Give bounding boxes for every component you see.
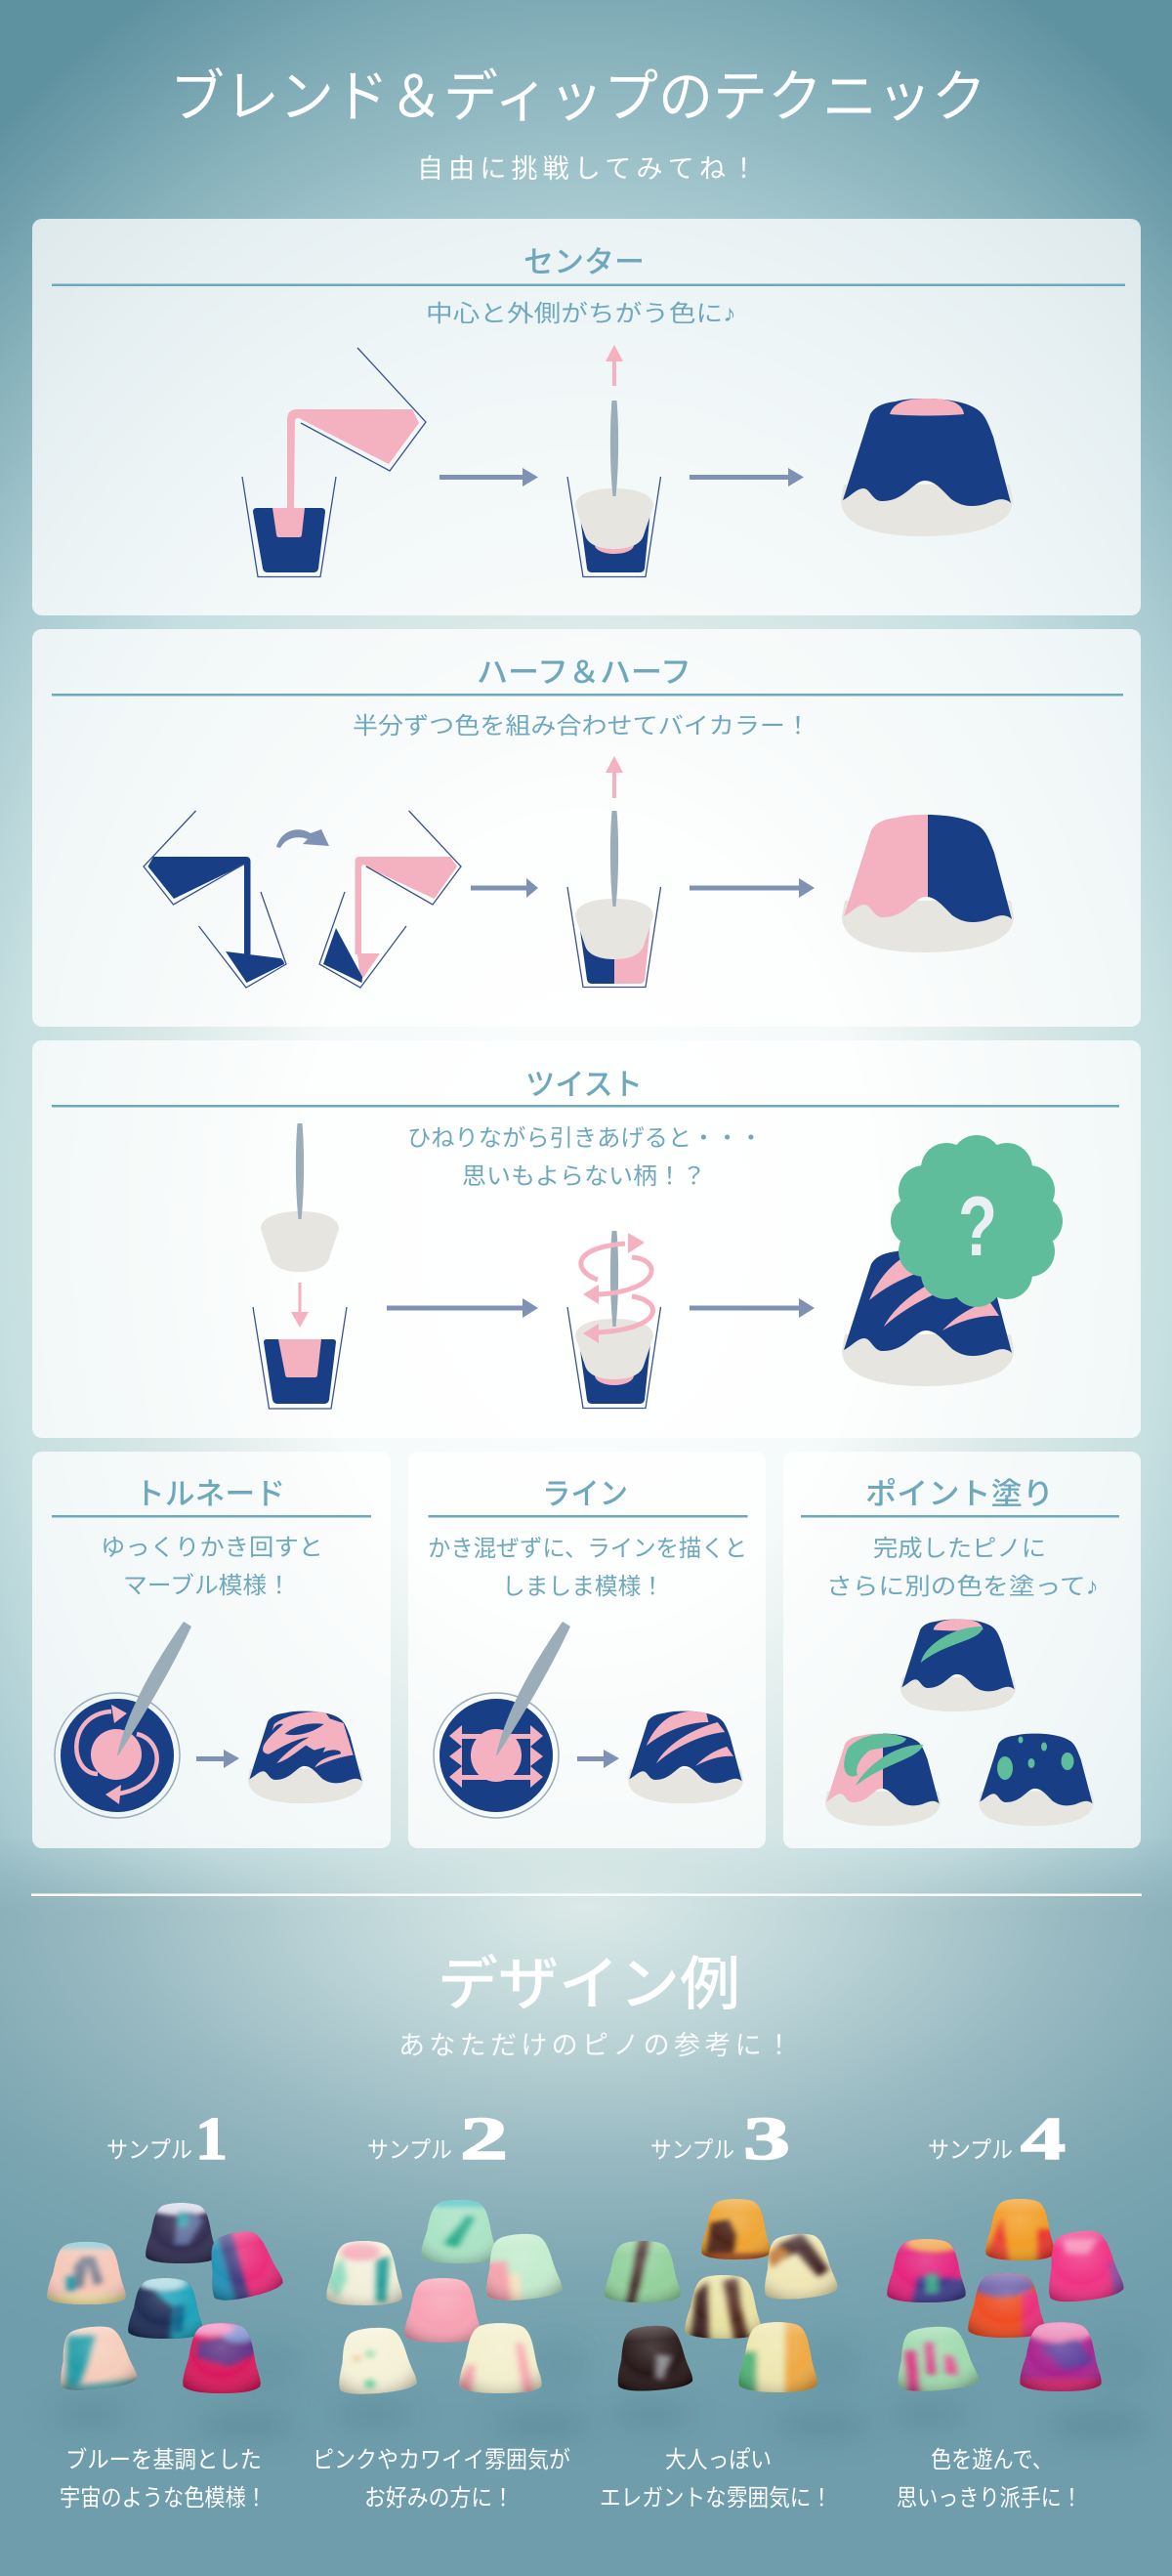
half pino with green swirl	[825, 1734, 941, 1826]
heading: ポイント塗り: ポイント塗り	[865, 1477, 1054, 1511]
sample 1	[38, 2106, 287, 2512]
heading: トルネード: トルネード	[135, 1477, 285, 1511]
result: marble pino	[248, 1711, 363, 1803]
result: pink-centered pino	[841, 399, 1013, 536]
arrow	[690, 1298, 815, 1318]
sample 3 caption: エレガントな雰囲気に！	[600, 2485, 832, 2512]
sample 4 label: 4	[1021, 2106, 1066, 2173]
result: half and half pino	[842, 815, 1014, 952]
sample 2 caption	[313, 2447, 570, 2512]
section heading: デザイン例: デザイン例	[438, 1952, 740, 2017]
sample 1 caption	[60, 2447, 267, 2512]
chocolate shadows	[49, 2335, 1152, 2440]
sample 1 caption: ブルーを基調とした	[65, 2447, 262, 2473]
sample 1 label	[106, 2106, 228, 2173]
panel: トルネード	[32, 1452, 391, 1848]
illustration: twisting while lifting	[567, 1231, 660, 1409]
badge: mystery question mark: ?	[958, 1180, 997, 1274]
description	[428, 1536, 747, 1600]
sample 4 label	[928, 2106, 1066, 2173]
description: さらに別の色を塗って♪	[826, 1574, 1099, 1600]
description: ゆっくりかき回すと	[101, 1535, 323, 1561]
panel: ハーフ&ハーフ	[32, 629, 1141, 1027]
panel: ライン	[408, 1452, 766, 1848]
arrow	[440, 468, 538, 486]
description: かき混ぜずに、ラインを描くと	[428, 1536, 747, 1562]
sample 2 label	[367, 2106, 508, 2173]
sample 2 caption: お好みの方に！	[364, 2485, 514, 2512]
result: striped pino	[628, 1711, 743, 1803]
sample 1 label: サンプル	[106, 2137, 192, 2164]
sample 3	[600, 2106, 839, 2512]
arrow	[577, 1750, 619, 1768]
description	[101, 1535, 323, 1599]
sample 4 caption	[897, 2447, 1082, 2512]
sample 3 label: サンプル	[650, 2137, 734, 2164]
sample 3 label	[650, 2106, 790, 2173]
heading: ハーフ&ハーフ: ハーフ＆ハーフ	[477, 655, 691, 690]
section subtitle: あなただけのピノの参考に！	[398, 2031, 792, 2060]
heading: ライン: ライン	[542, 1477, 628, 1511]
illustration: pouring pink into glass	[242, 348, 426, 576]
description: 半分ずつ色を組み合わせてバイカラー！	[353, 713, 811, 739]
result: twisted pino	[842, 1248, 1014, 1386]
sample 4 caption: 思いっきり派手に！	[897, 2485, 1082, 2512]
description: マーブル模様！	[123, 1573, 291, 1599]
chocolates: flashy pattern	[887, 2199, 1135, 2400]
sample 1 label: 1	[195, 2106, 228, 2173]
illustration: lifting the dipped piece	[567, 345, 660, 576]
chocolates: blue cosmic pattern	[47, 2203, 283, 2393]
sample 3 caption	[600, 2447, 832, 2512]
illustration: pouring navy	[144, 811, 286, 988]
heading: センター: センター	[523, 245, 645, 279]
chocolates: elegant pattern	[605, 2199, 839, 2399]
description: しましま模様！	[502, 1574, 664, 1600]
chocolates: pink and cute pattern	[325, 2194, 565, 2400]
illustration: lifting the half and half piece	[567, 756, 660, 987]
badge: mystery question mark	[891, 1135, 1063, 1307]
description: 中心と外側がちがう色に♪	[426, 301, 736, 327]
subtitle: 自由に挑戦してみてね！	[417, 154, 757, 184]
illustration: swirl stirring dish	[55, 1622, 191, 1818]
sample 2 label: サンプル	[367, 2137, 452, 2164]
sample 4 caption: 色を遊んで、	[931, 2447, 1053, 2473]
curved arrow	[276, 829, 329, 848]
arrow	[690, 878, 815, 898]
illustration: dipping	[253, 1123, 347, 1409]
title: ブレンド＆ディップのテクニック	[170, 65, 986, 129]
arrow	[387, 1298, 538, 1318]
sample 3 caption: 大人っぽい	[665, 2447, 772, 2473]
description: ひねりながら引きあげると・・・	[407, 1125, 763, 1152]
sample 4 label: サンプル	[928, 2137, 1013, 2164]
sample 2	[313, 2106, 570, 2512]
illustration: pouring pink	[319, 811, 461, 988]
sample 1 caption: 宇宙のような色模様！	[60, 2485, 267, 2512]
description	[407, 1125, 763, 1190]
panel: センター	[32, 219, 1141, 615]
arrow	[690, 468, 804, 486]
panel: ツイスト	[32, 1040, 1141, 1438]
arrow	[471, 878, 538, 898]
description: 思いもよらない柄！？	[462, 1163, 706, 1190]
pino with green leaf	[900, 1620, 1016, 1711]
description: 完成したピノに	[873, 1536, 1046, 1562]
navy pino with green dots	[979, 1734, 1094, 1826]
description	[826, 1536, 1099, 1600]
illustration: line drawing dish	[434, 1622, 570, 1818]
panel: ポイント塗り	[783, 1452, 1141, 1848]
arrow	[196, 1750, 239, 1768]
sample 2 label: 2	[460, 2106, 508, 2173]
sample 3 label: 3	[743, 2106, 790, 2173]
heading: ツイスト: ツイスト	[525, 1068, 643, 1102]
sample 2 caption: ピンクやカワイイ雰囲気が	[313, 2447, 570, 2473]
sample 4	[887, 2106, 1135, 2512]
